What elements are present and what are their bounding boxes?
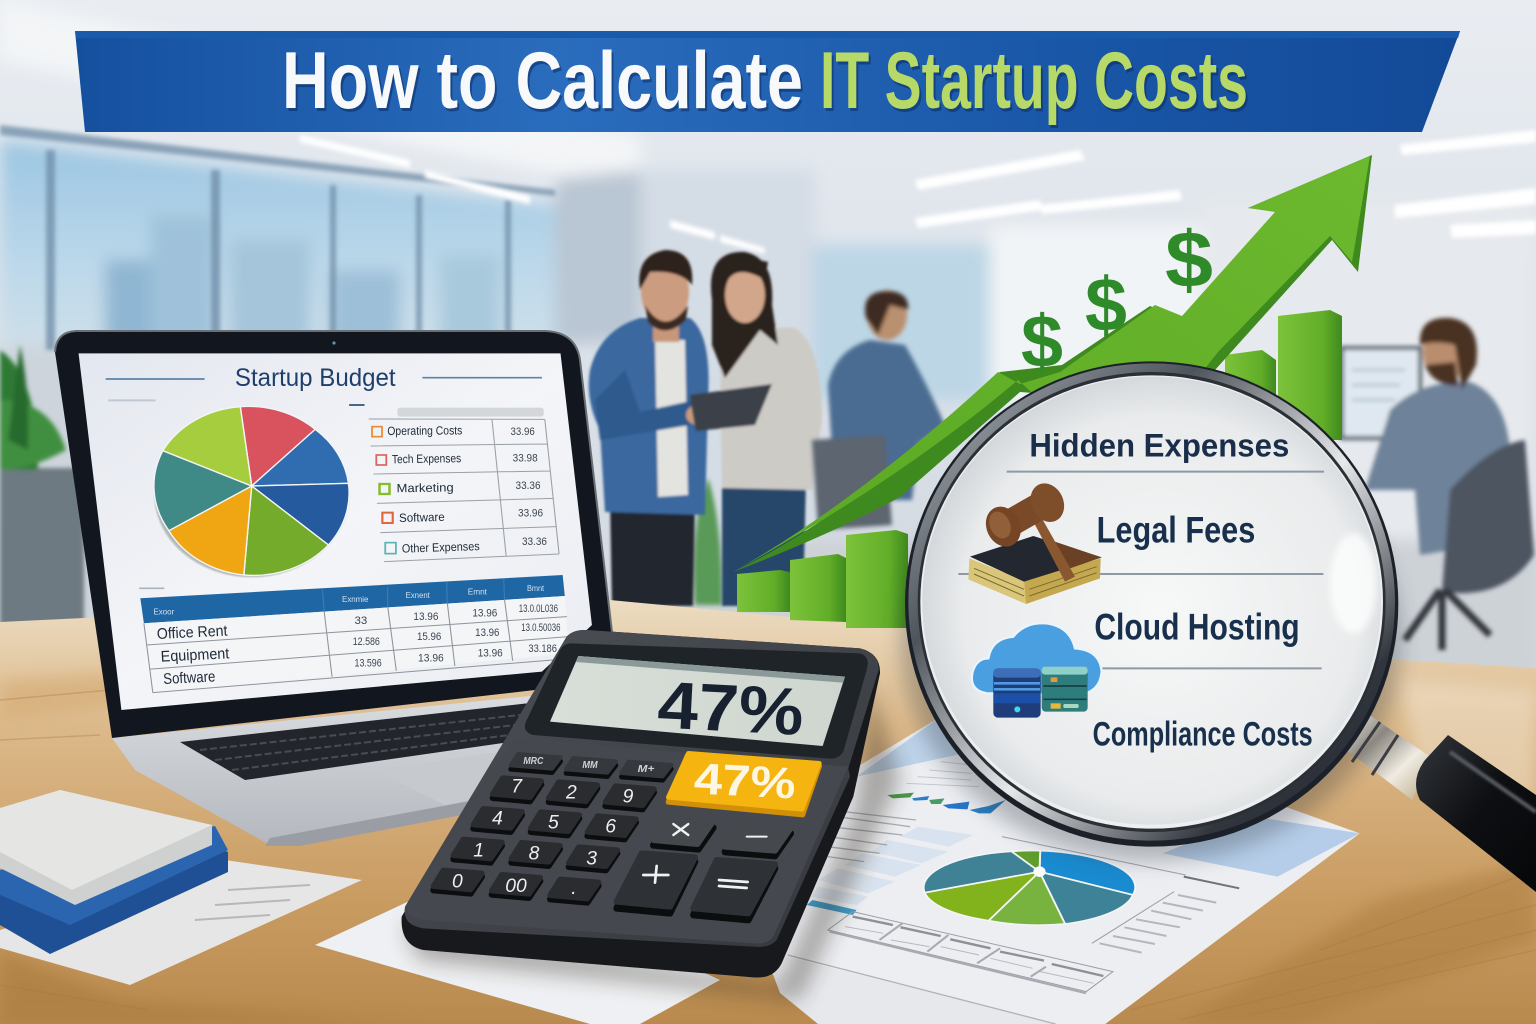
display bezel <box>525 643 868 759</box>
laptop lid <box>55 331 612 738</box>
expense table: 13.0.50036 <box>521 622 561 634</box>
person: woman in grey sweater <box>690 252 822 606</box>
wood grain <box>0 650 1536 1024</box>
budget legend table <box>369 419 559 562</box>
desk surface <box>0 600 1536 1024</box>
expense table: Exoor <box>154 608 174 616</box>
lens contact shadow <box>901 418 1401 862</box>
calculator: 47% <box>656 668 806 750</box>
plants and planter <box>0 345 722 633</box>
number keys: 1 <box>473 840 484 861</box>
expense table: 33.186 <box>528 643 557 655</box>
expense table: 13.596 <box>355 658 382 670</box>
number keys: 00 <box>505 876 527 897</box>
trackpad <box>375 752 500 805</box>
title text: How to Calculate <box>284 39 805 129</box>
green rising arrow <box>733 155 1372 572</box>
budget legend table: 33.36 <box>516 480 541 492</box>
number keys: 5 <box>548 812 559 833</box>
magnifying glass lens <box>905 361 1398 847</box>
number keys: 4 <box>492 808 503 829</box>
screen heading <box>106 365 544 588</box>
operator keys <box>617 820 791 920</box>
expense table: 33 <box>355 615 367 627</box>
expense table: Exnent <box>406 591 431 600</box>
LCD display <box>550 656 845 746</box>
budget legend table: Other Expenses <box>402 539 480 556</box>
yellow percent key: 47% <box>693 754 797 809</box>
budget pie chart <box>154 406 349 577</box>
laptop <box>55 331 612 846</box>
ceiling lights <box>300 130 1536 254</box>
financial report paper <box>769 717 1360 1024</box>
expense table: 13.0.0L036 <box>519 603 558 615</box>
paper pie chart <box>924 851 1135 925</box>
icon: cloud with servers <box>972 623 1102 718</box>
office background <box>0 0 1536 690</box>
expense table: 13.96 <box>478 648 503 660</box>
number keys: . <box>571 878 577 899</box>
number keys: 0 <box>452 872 463 893</box>
budget legend table: Tech Expenses <box>392 452 461 466</box>
function keys: MRC <box>523 756 544 767</box>
dollar signs <box>1021 215 1213 383</box>
mini bar strip <box>887 793 1006 813</box>
number keys: 3 <box>586 848 597 869</box>
expense table: Office Rent <box>156 623 228 643</box>
second sheet under report <box>760 940 1105 1024</box>
expense table: 12.586 <box>353 636 380 648</box>
expense table: 13.96 <box>413 611 438 623</box>
green growth bars <box>737 310 1342 628</box>
budget legend table: 33.36 <box>522 536 547 548</box>
laptop screen <box>79 353 592 710</box>
title text <box>282 36 1250 129</box>
expense table: Bmnt <box>527 584 545 593</box>
number keys: 6 <box>605 816 616 837</box>
dollar signs: $ <box>1165 215 1213 304</box>
title text: IT Startup Costs <box>822 39 1250 129</box>
number keys: 7 <box>511 777 523 798</box>
blurred windows and room <box>0 0 1536 690</box>
paper blocks and table <box>811 827 973 905</box>
number keys: 9 <box>623 786 634 807</box>
hidden expense items: Cloud Hosting <box>1094 605 1300 647</box>
person: man in denim shirt <box>589 250 709 606</box>
hidden expense items: Legal Fees <box>1097 509 1255 551</box>
number keys: 8 <box>529 844 540 865</box>
person: colleague at back <box>812 290 945 530</box>
person: developer at desk, monitor and chair <box>1342 318 1534 650</box>
expense table: Exnmie <box>342 595 369 604</box>
budget legend table: 33.96 <box>511 426 535 438</box>
expense table: Emnt <box>468 588 488 596</box>
expense table: Software <box>163 669 216 688</box>
function keys: MM <box>582 760 598 771</box>
budget legend table: Operating Costs <box>387 424 462 438</box>
function keys <box>511 754 671 780</box>
title banner <box>75 31 1460 132</box>
title text: How to Calculate <box>282 36 803 126</box>
expense table: 13.96 <box>418 653 444 665</box>
dollar signs: $ <box>1021 300 1063 383</box>
keyboard <box>180 703 530 780</box>
number keys <box>433 777 654 903</box>
hidden expense items <box>1093 509 1313 753</box>
budget legend table: Software <box>399 510 445 525</box>
budget legend table: 33.96 <box>518 508 543 520</box>
screen heading: Startup Budget <box>235 365 396 392</box>
expense table: 13.96 <box>475 627 499 639</box>
yellow percent key <box>668 753 819 815</box>
budget legend table: Marketing <box>396 481 454 495</box>
expense table: 13.96 <box>472 608 497 620</box>
lens heading: Hidden Expenses <box>1029 428 1289 464</box>
dollar signs: $ <box>1085 263 1127 348</box>
icon: gavel on law book <box>968 478 1102 604</box>
window frames <box>0 125 555 350</box>
function keys: M+ <box>638 764 655 775</box>
title text: IT Startup Costs <box>820 36 1248 126</box>
number keys: 2 <box>565 782 577 803</box>
notebooks and paper at left <box>0 790 362 985</box>
expense table <box>140 575 569 693</box>
calculator shadow <box>402 680 900 1000</box>
calculator <box>402 630 880 978</box>
budget legend table: 33.98 <box>513 453 538 464</box>
laptop base <box>112 695 540 845</box>
hidden expense items: Compliance Costs <box>1093 715 1313 753</box>
paper under calculator <box>315 868 720 1024</box>
expense table: Equipment <box>160 646 230 665</box>
magnifying glass handle <box>1340 712 1536 892</box>
expense table: 15.96 <box>417 631 441 643</box>
